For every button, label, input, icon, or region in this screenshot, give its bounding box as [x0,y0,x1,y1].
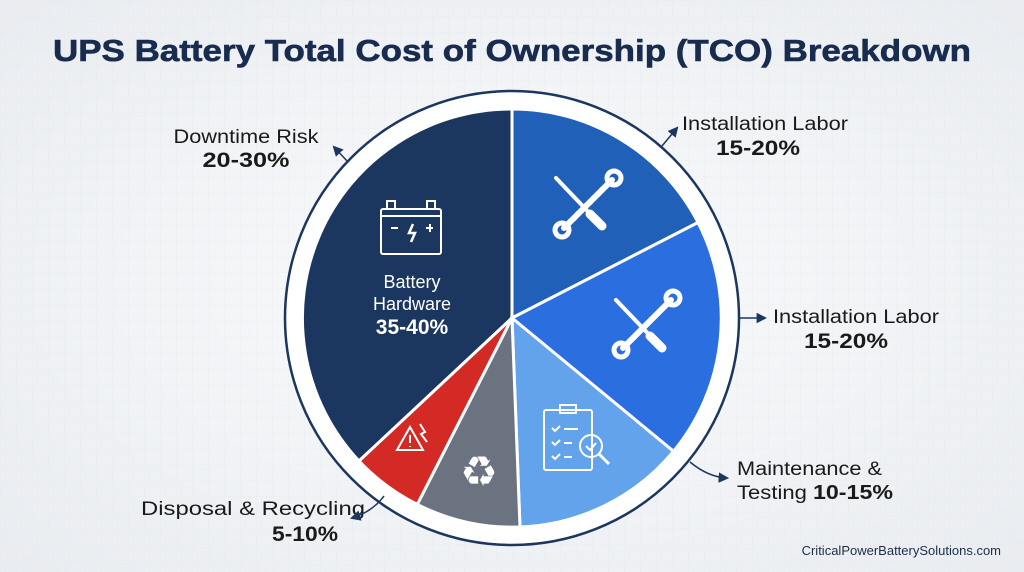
slice: disposal [417,318,520,527]
icon: recycle: ♻ [460,448,498,495]
label: installation labor 1: Installation Labor [682,114,849,135]
icon: tools 1 [555,171,621,237]
icon: warning [397,424,427,450]
text: Hardware [373,294,451,314]
label: installation labor 2: 15-20% [804,330,888,353]
arrow: downtime [334,147,348,162]
label: disposal: 5-10% [272,523,338,546]
label: maintenance: Testing 10-15% [737,482,893,504]
slice: downtime [359,318,512,504]
label: installation labor 1 [682,114,849,160]
label: maintenance: Maintenance & [737,459,882,480]
slice: battery hardware [302,109,512,461]
label: installation labor 2 [773,307,940,353]
slice: installation labor 2 [512,222,721,451]
slice: installation labor 1 [512,109,698,318]
label: maintenance [737,459,893,504]
label: installation labor 2: Installation Labor [773,307,940,328]
slice: maintenance [512,318,674,527]
text: 35-40% [376,316,449,339]
label: downtime risk: 20-30% [202,149,290,172]
label: downtime risk: Downtime Risk [174,127,319,148]
label: disposal [141,499,365,546]
arrow: disposal [352,496,384,518]
label: downtime risk [174,127,319,172]
icon: clipboard [544,405,609,470]
arrow: installation 1 [662,128,677,146]
footer url: CriticalPowerBatterySolutions.com [802,543,1001,558]
arrow: installation 2 [740,317,765,319]
pie chart [285,91,739,545]
icon: tools 2 [614,291,680,357]
text: battery hardware: Battery [383,272,441,292]
label: installation labor 1: 15-20% [716,137,800,160]
title: UPS Battery Total Cost of Ownership (TCO) Breakdown [53,33,971,68]
label: disposal: Disposal & Recycling [141,499,365,520]
icon: battery [381,201,441,254]
arrow: maintenance [690,462,727,478]
